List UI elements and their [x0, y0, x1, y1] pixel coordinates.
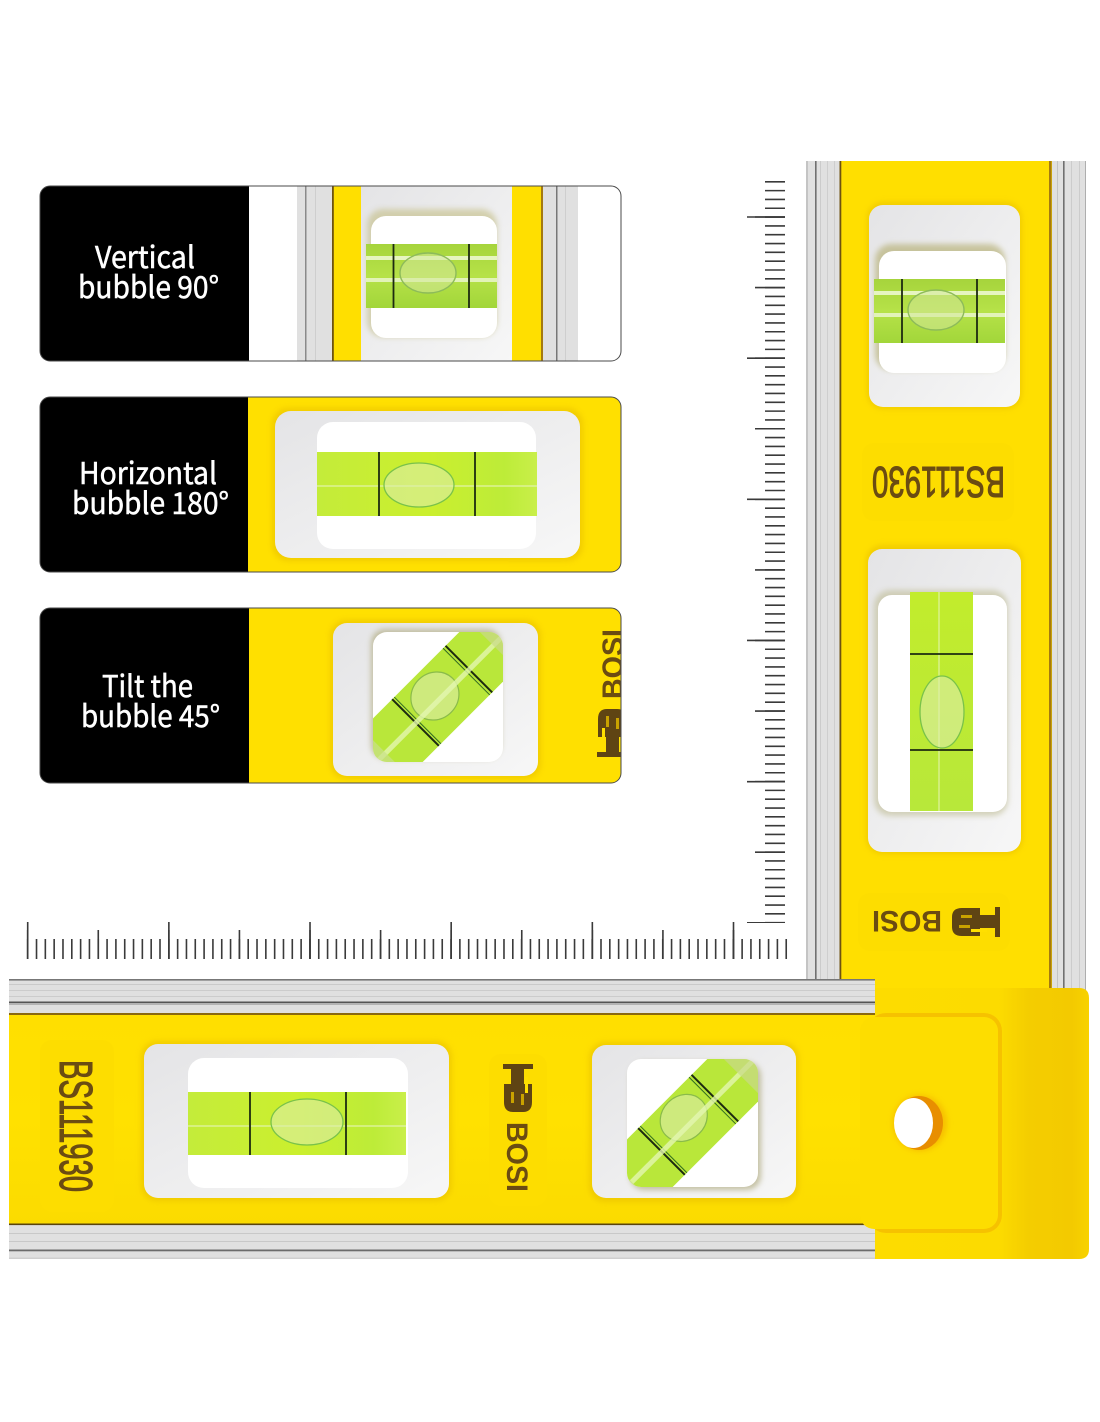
cap inset ridge — [868, 1013, 1002, 1233]
BOSI logo: BOSI — [872, 904, 942, 937]
hanging hole — [893, 1095, 947, 1151]
model number: BS111930 — [872, 457, 1005, 506]
model number — [40, 1040, 114, 1212]
left vial window — [141, 1041, 452, 1201]
level photo crop: tilted — [330, 619, 620, 780]
label text: bubble 45° — [81, 692, 220, 736]
infographic: bubble level — [9, 161, 1089, 1259]
end cap — [860, 988, 1089, 1259]
model number: BS111930 — [50, 1060, 102, 1192]
horizontal level — [9, 979, 1089, 1259]
right aluminium rail — [1050, 161, 1086, 991]
panel: vertical bubble 90° — [40, 186, 621, 361]
top aluminium rail — [9, 979, 875, 1016]
label text: Vertical — [95, 233, 195, 277]
tilted vial window — [588, 1042, 800, 1202]
label text: bubble 90° — [78, 263, 219, 307]
left aluminium rail — [806, 161, 840, 991]
black label block — [40, 186, 249, 361]
label text — [72, 449, 229, 523]
label text: bubble 180° — [72, 479, 229, 523]
horizontal ruler — [27, 940, 789, 949]
bottom vial window — [866, 545, 1023, 854]
panel: tilt the bubble 45° — [40, 608, 622, 784]
level photo crop: horizontal — [272, 408, 583, 561]
model number — [862, 443, 1014, 521]
black label block — [40, 608, 249, 783]
label text: Horizontal — [79, 449, 217, 493]
BOSI logo — [489, 1054, 547, 1206]
vertical ruler — [766, 181, 775, 923]
yellow body — [840, 161, 1052, 991]
top vial window — [867, 202, 1022, 409]
vertical level — [806, 161, 1086, 991]
BOSI logo — [597, 631, 620, 757]
black label block — [40, 397, 248, 572]
label text — [78, 233, 219, 307]
panel: horizontal bubble 180° — [40, 397, 621, 572]
label text: Tilt the — [102, 662, 193, 706]
yellow body — [9, 1014, 879, 1225]
level photo crop: vertical — [297, 186, 578, 361]
label text — [81, 662, 220, 736]
bottom aluminium rail — [9, 1224, 875, 1259]
BOSI logo: BOSI — [500, 1122, 533, 1192]
BOSI logo — [858, 893, 1010, 951]
BOSI logo: BOSI — [597, 629, 630, 699]
